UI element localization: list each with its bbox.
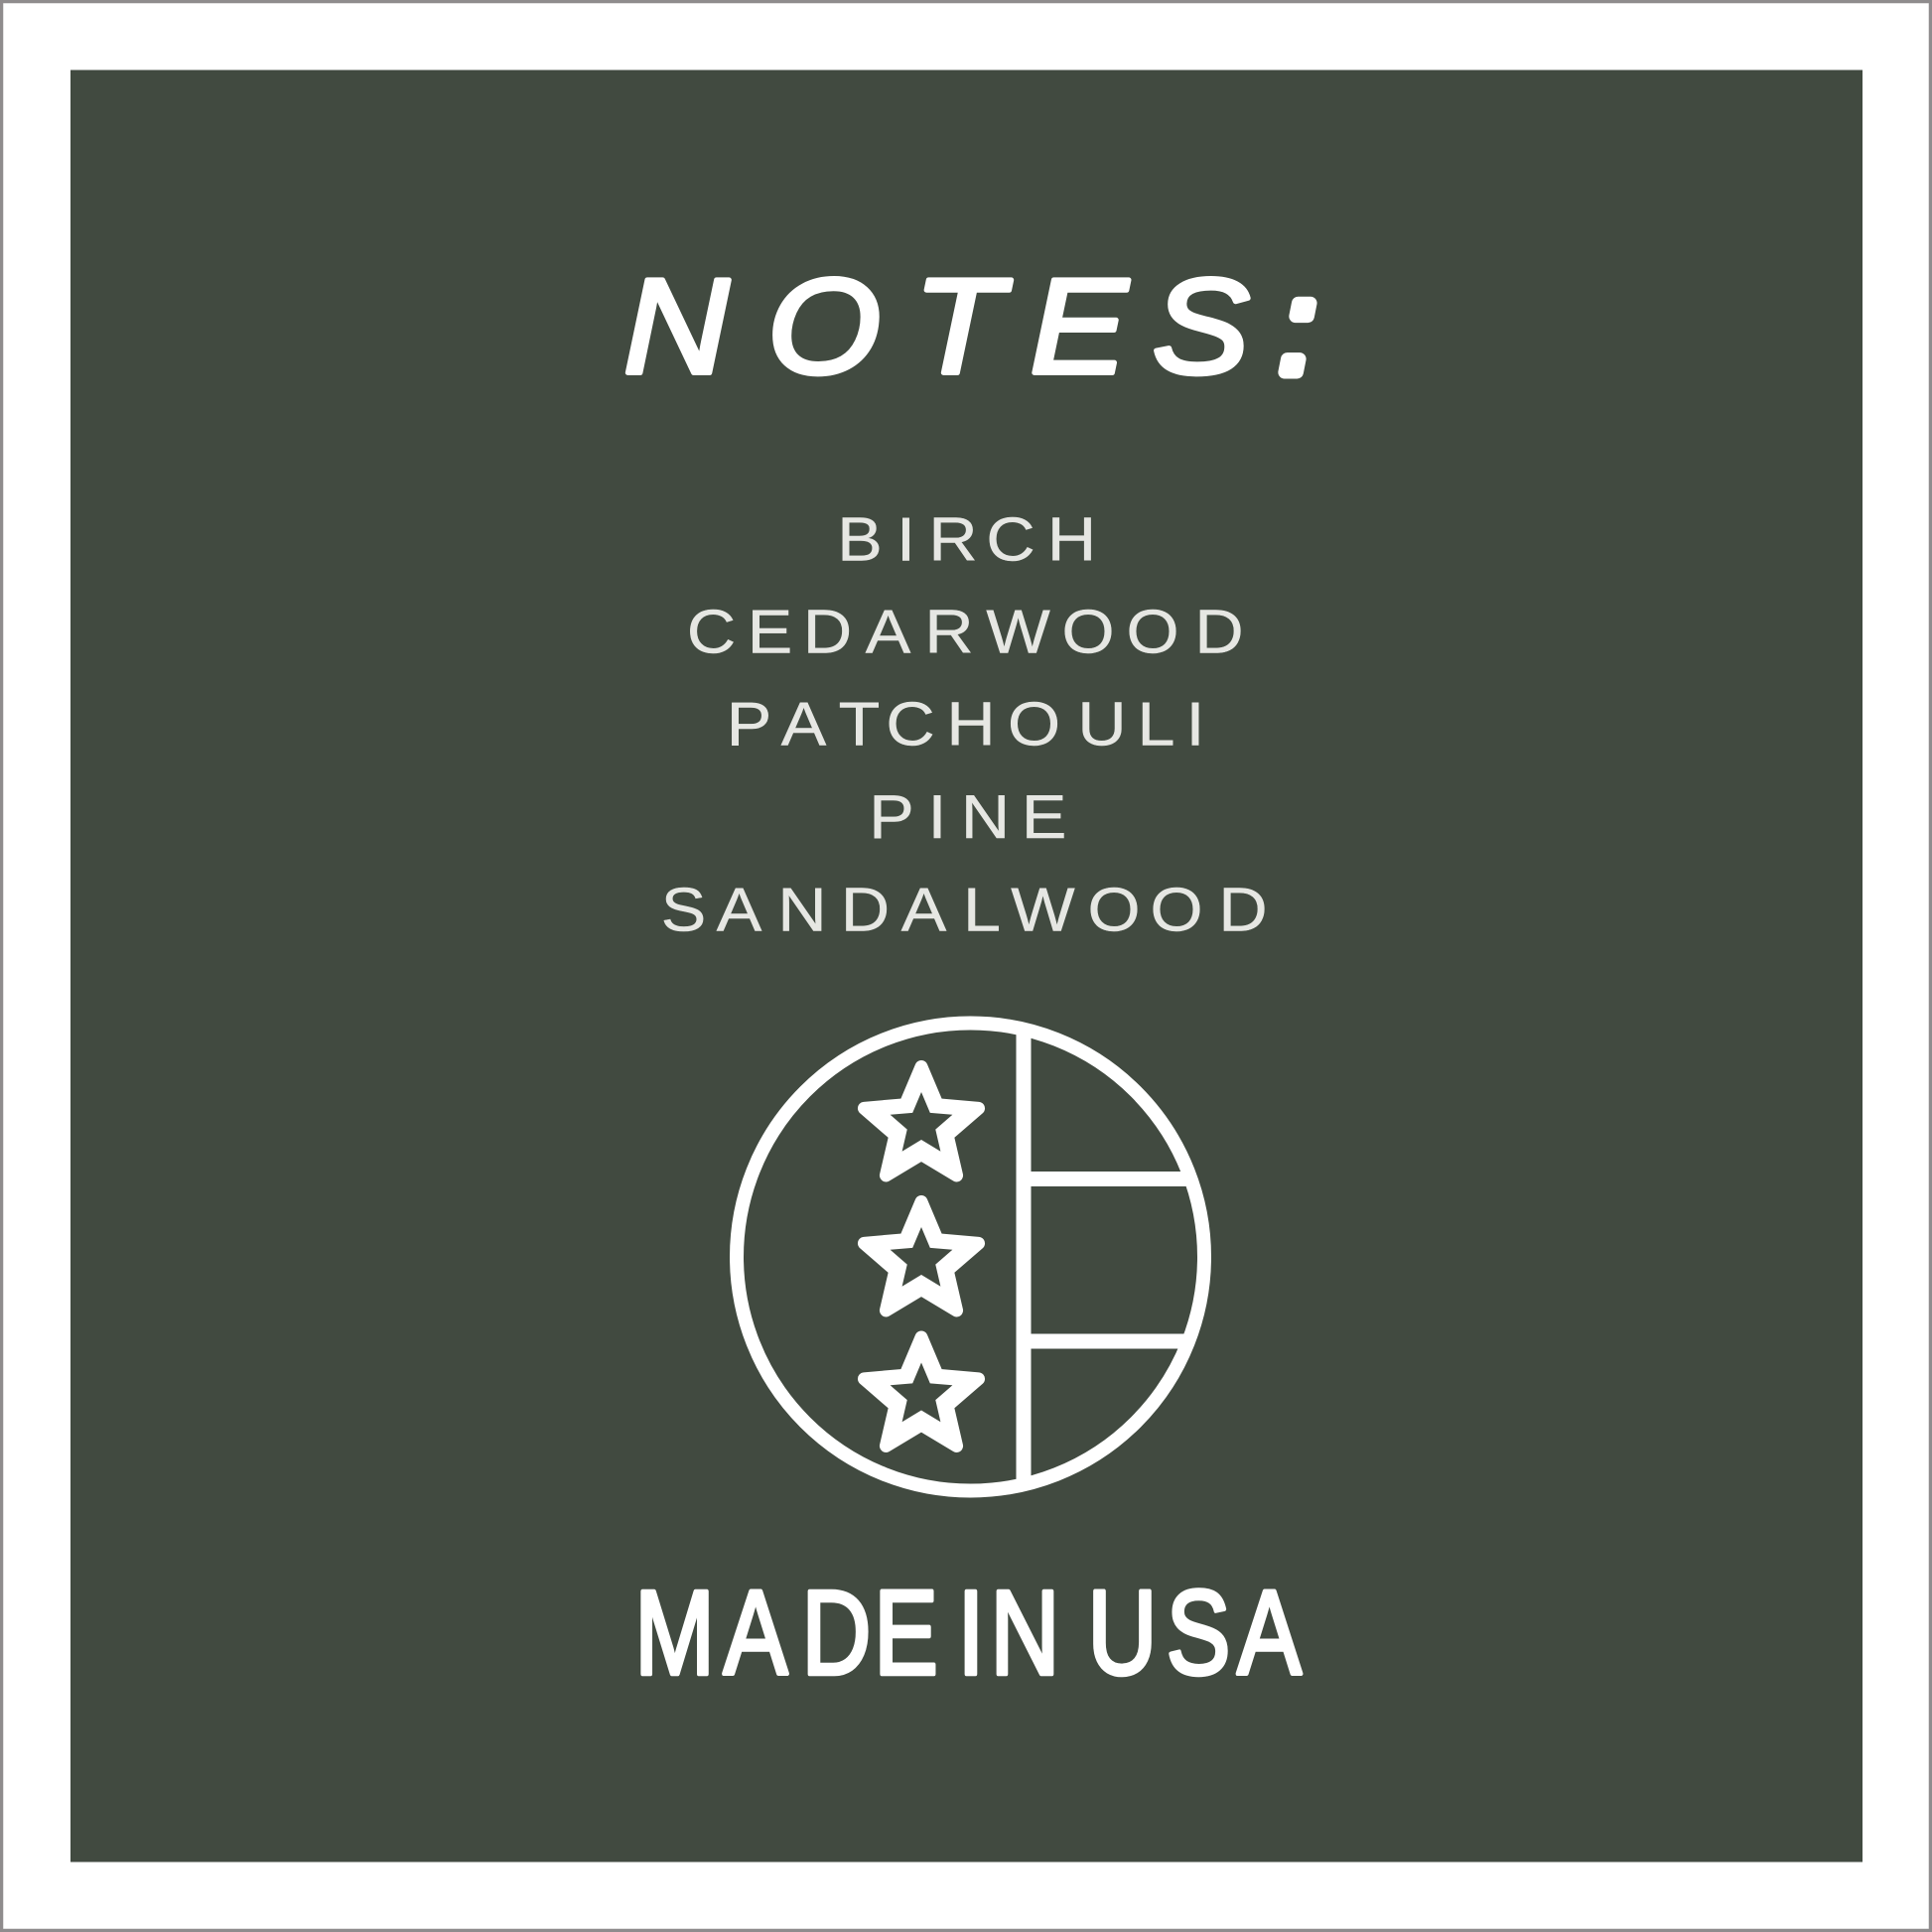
text block: list of scent notes: PINE bbox=[869, 782, 1066, 851]
text block: list of scent notes bbox=[661, 505, 1268, 944]
heading: notes title: : bbox=[1280, 254, 1315, 400]
icon: star middle bbox=[864, 1201, 979, 1311]
text block: list of scent notes: BIRCH bbox=[837, 505, 1096, 574]
icon: star top bbox=[864, 1066, 979, 1175]
text block: list of scent notes: PATCHOULI bbox=[727, 689, 1204, 759]
heading: notes title: NOTES bbox=[623, 251, 1250, 401]
text block: list of scent notes: SANDALWOOD bbox=[661, 875, 1268, 944]
text block: list of scent notes: CEDARWOOD bbox=[687, 597, 1244, 666]
icon: star bottom bbox=[864, 1337, 979, 1446]
text: made in usa caption: MADEINUSA bbox=[634, 1567, 1302, 1701]
icon: circular USA flag with stars bbox=[737, 1023, 1204, 1491]
